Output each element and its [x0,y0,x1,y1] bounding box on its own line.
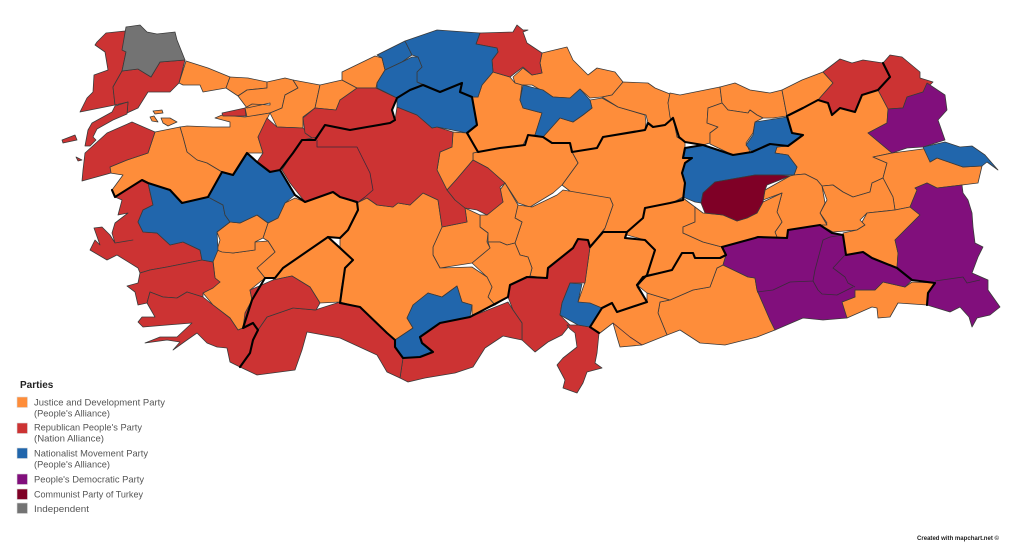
legend item: Nationalist Movement Party: (People's Alliance) [34,460,110,470]
legend item: Nationalist Movement Party: Nationalist Movement Party [34,448,148,460]
legend item: Independent: Independent [34,504,89,515]
attribution: Created with mapchart.net © [917,535,1000,542]
legend item: Communist Party of Turkey: Communist Party of Turkey [34,490,143,500]
internal province borders [317,140,980,345]
legend title: Parties [20,380,54,391]
legend item: Nationalist Movement Party [17,448,148,470]
province won by Communist Party of Turkey (maroon) [701,175,790,221]
Malatya-area province filling the gap [627,198,726,275]
legend item: Republican People's Party [17,422,142,444]
legend item: Justice and Development Party: (People's Alliance) [34,408,110,420]
choropleth map of Turkey [62,25,1000,393]
legend item: Republican People's Party: Republican People's Party [34,422,142,434]
thick electoral alliance boundaries [112,63,935,367]
legend item: People's Democratic Party: People's Democratic Party [34,474,144,486]
legend item: Justice and Development Party: Justice and Development Party [34,398,165,408]
provinces won by Nationalist Movement Party (blue) [138,30,998,358]
provinces won by People's Democratic Party (purple) [722,83,1000,330]
legend item: Justice and Development Party [17,397,165,420]
provinces won by Justice and Development Party (orange) [110,47,982,347]
province won by Independent (gray) [122,25,185,77]
legend: parties [17,380,165,515]
legend item: Independent [17,503,89,515]
provinces won by Republican People's Party (red) [62,25,933,393]
legend item: Republican People's Party: (Nation Alliance) [34,434,104,444]
